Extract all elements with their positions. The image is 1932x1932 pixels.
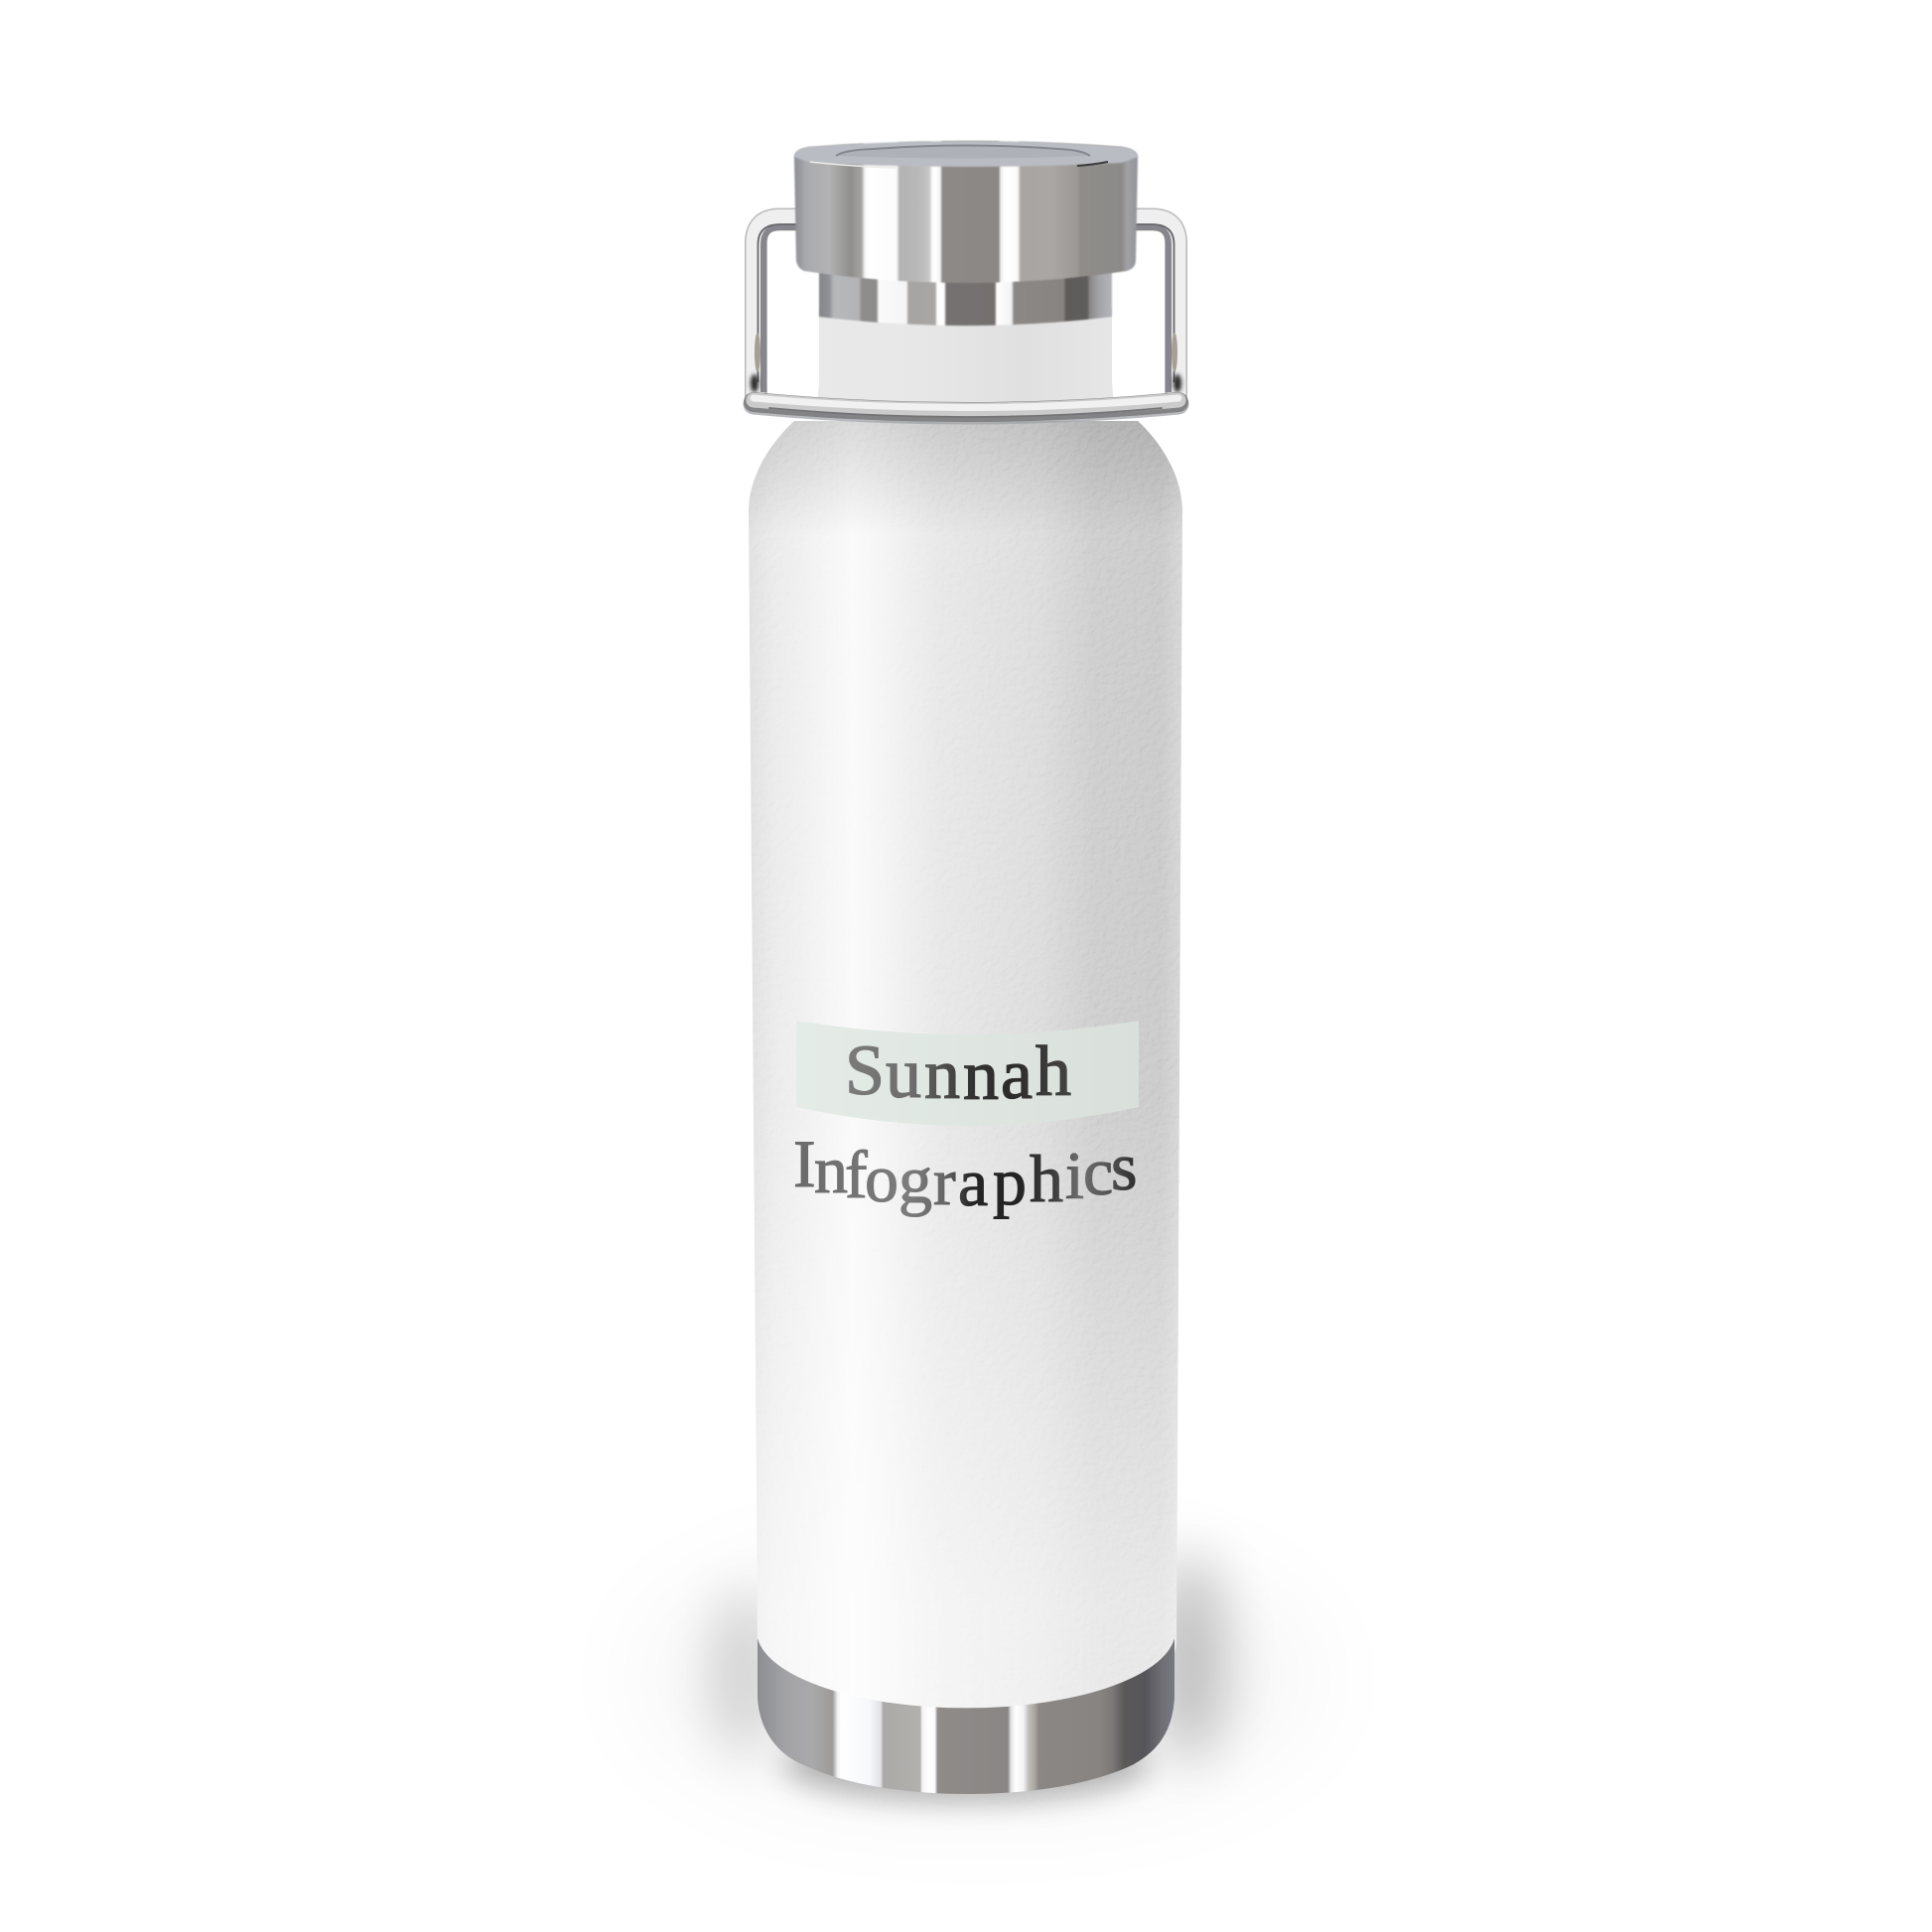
steel lid bbox=[794, 141, 1138, 283]
label text: Sunnah: Sunnah bbox=[845, 1031, 1071, 1115]
left loop bbox=[751, 218, 800, 397]
bottle body bbox=[745, 417, 1191, 1727]
bottle neck bbox=[815, 308, 1116, 417]
right loop bbox=[1132, 218, 1181, 397]
handle bottom bar bbox=[754, 398, 1178, 417]
product illustration: insulated bottle bbox=[678, 140, 1270, 1823]
handle side loops bbox=[751, 218, 1181, 397]
steel base bbox=[758, 1638, 1174, 1794]
label band bbox=[796, 1021, 1139, 1126]
steel collar ring bbox=[819, 266, 1112, 326]
powder-coat texture bbox=[780, 425, 1177, 1305]
label text: Infographics: Infographics bbox=[793, 1126, 1137, 1220]
soft floor shadow bbox=[640, 1549, 1315, 1807]
